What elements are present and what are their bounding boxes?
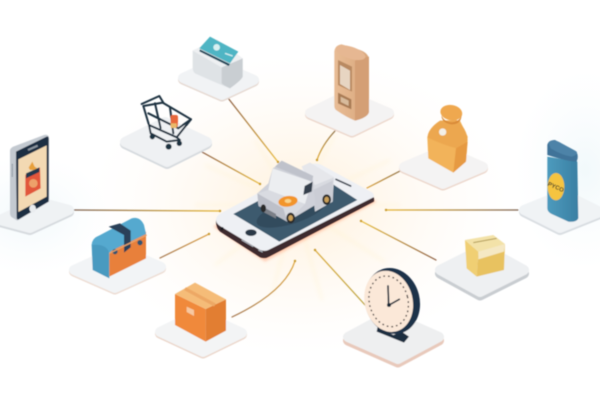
icon: cash on white box (193, 37, 243, 88)
speaker (336, 179, 351, 186)
icon: blue can: PYCO (546, 182, 565, 194)
connector: cart to hub (202, 152, 260, 184)
home button (245, 229, 257, 236)
icon: blue can (546, 140, 578, 222)
delivery truck (253, 161, 334, 234)
panel: small box platform (440, 248, 524, 296)
panel: orange jar platform (404, 150, 483, 186)
icon: tall tan container (334, 42, 369, 121)
connector lines (74, 98, 518, 317)
panel: clock platform (348, 315, 439, 362)
central phone hub (213, 161, 377, 262)
icon: shopping cart (142, 96, 191, 150)
connector: cash to hub (228, 98, 278, 162)
connector: toolbox to hub (160, 234, 209, 258)
panel: blue can platform (524, 194, 600, 230)
connector: small box to hub (361, 221, 436, 260)
icon: orange jar (427, 103, 468, 173)
arrow tips (208, 159, 387, 262)
connector: clock to hub (315, 250, 366, 306)
panel: cash platform (183, 63, 254, 96)
panel: cart platform (125, 122, 207, 164)
panel: orange box platform (160, 313, 242, 354)
icon: orange parcel (175, 283, 226, 342)
phone body (216, 164, 374, 258)
icon: yellow box (465, 235, 505, 277)
icon: wall clock (358, 262, 427, 343)
panel: toolbox platform (74, 249, 161, 290)
phone glow (213, 168, 377, 262)
icon: toolbox (92, 218, 147, 278)
connector: tall bottle to hub (317, 131, 335, 160)
connector: blue can to hub (386, 209, 518, 211)
phone screen (233, 172, 357, 242)
connector: jar to hub (367, 170, 402, 188)
connector: orange box to hub (232, 261, 295, 317)
panel: tall bottle platform (310, 95, 389, 132)
connector: left phone to hub (74, 210, 220, 211)
icon: smartphone with product (10, 135, 49, 221)
light rays around central phone (195, 135, 400, 300)
panel: left phone platform (0, 202, 69, 230)
